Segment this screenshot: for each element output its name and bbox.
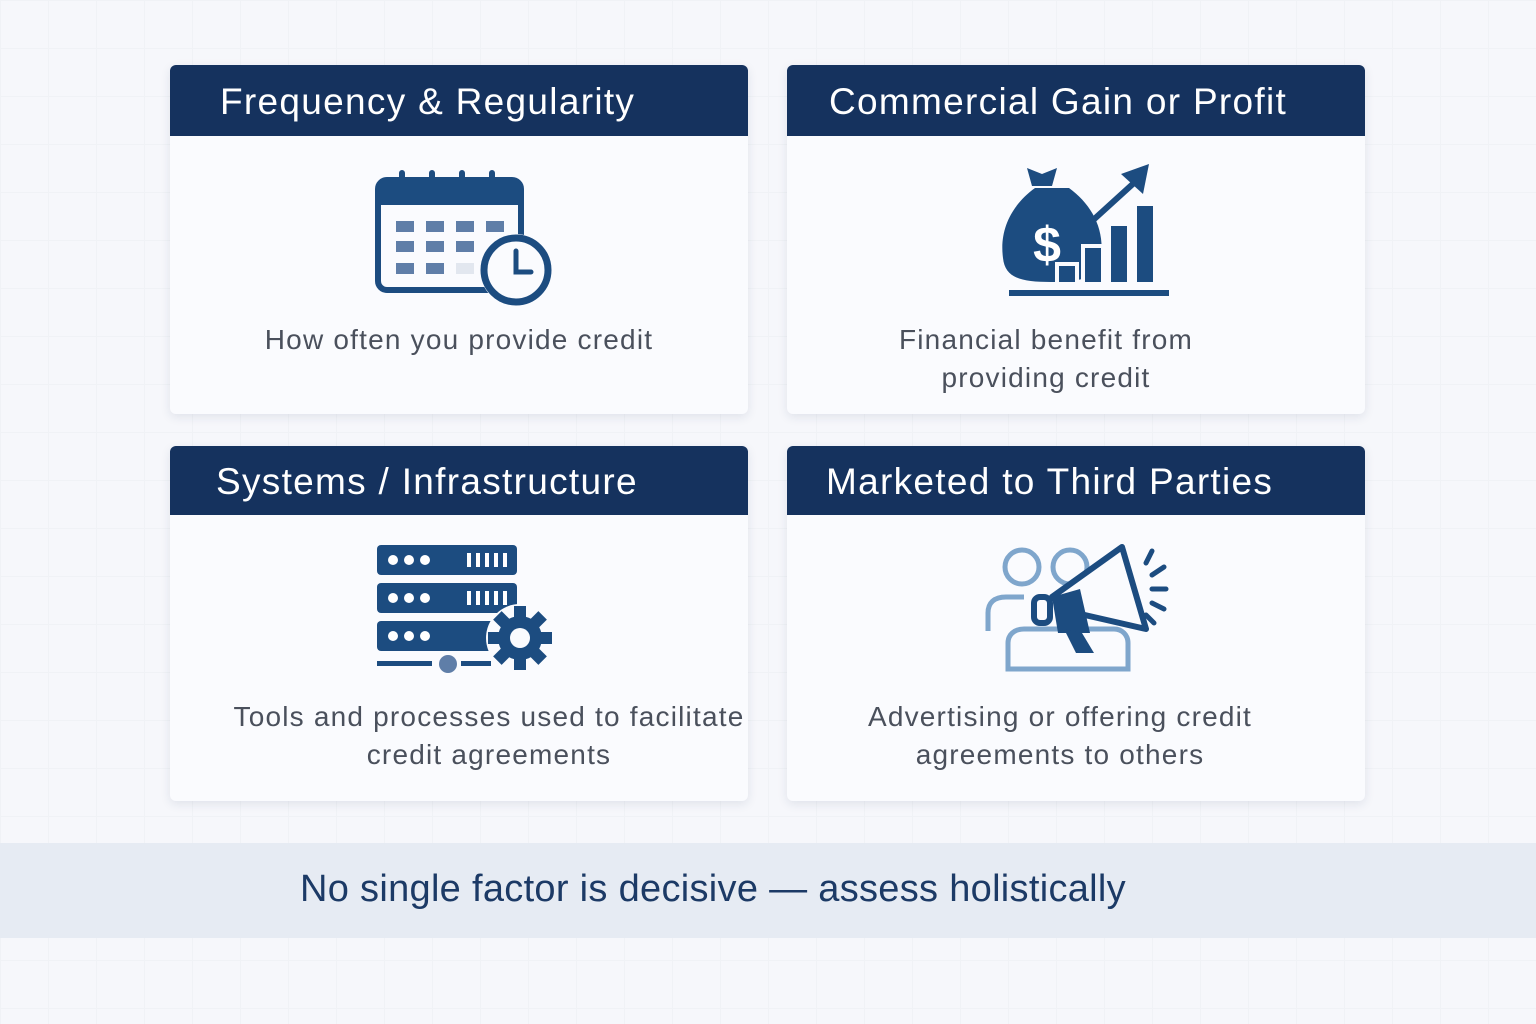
text: systems: credit agreements: [367, 739, 611, 770]
heading: commercial: [787, 65, 1365, 136]
panel: commercial: [787, 65, 1365, 414]
heading: frequency: [170, 65, 748, 136]
icon: money bag chart: $: [1033, 217, 1061, 273]
text: frequency: How often you provide credit: [265, 324, 653, 355]
icon: money bag chart: [1002, 164, 1169, 296]
heading: marketed: Marketed to Third Parties: [826, 461, 1273, 502]
text: marketed: Advertising or offering credit: [868, 701, 1252, 732]
banner: summary: [0, 843, 1536, 938]
heading: marketed: [787, 446, 1365, 515]
heading: systems: Systems / Infrastructure: [216, 461, 638, 502]
text: commercial: providing credit: [941, 362, 1151, 393]
icon: servers gear: [377, 545, 552, 673]
text: systems: Tools and processes used to facilitate: [234, 701, 744, 732]
icon: people megaphone: [986, 544, 1168, 672]
text: marketed: [868, 701, 1252, 770]
heading: frequency: Frequency & Regularity: [220, 81, 635, 122]
panel: systems: [170, 446, 748, 801]
panel: marketed: [787, 446, 1365, 801]
text: systems: [234, 701, 744, 770]
text: commercial: [899, 324, 1193, 393]
text: marketed: agreements to others: [916, 739, 1204, 770]
text: summary: No single factor is decisive — assess holistically: [300, 868, 1126, 910]
text: commercial: Financial benefit from: [899, 324, 1193, 355]
heading: systems: [170, 446, 748, 515]
icon: calendar clock: [375, 170, 552, 306]
heading: commercial: Commercial Gain or Profit: [829, 81, 1287, 122]
panel: frequency: [170, 65, 748, 414]
